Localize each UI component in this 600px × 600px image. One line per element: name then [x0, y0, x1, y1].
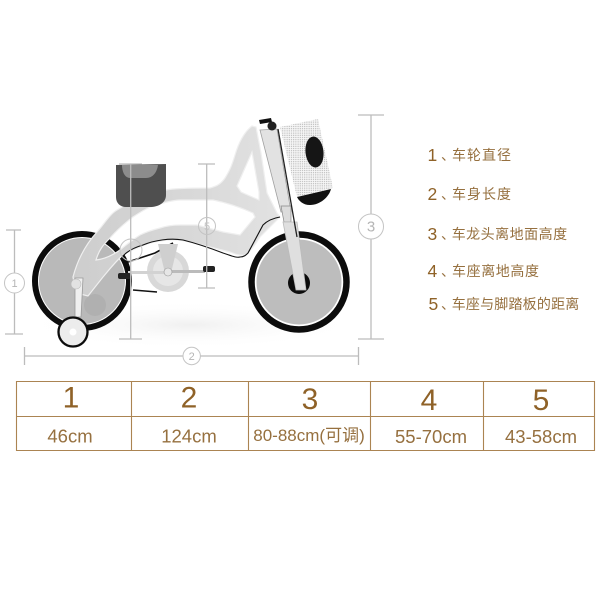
measurement values [47, 426, 577, 447]
measurement values: 43-58cm [505, 426, 577, 447]
ground shadow [20, 301, 360, 349]
pedal arm and pedal [118, 266, 215, 279]
legend item 3: 、 [441, 226, 455, 242]
rear drive pulley [128, 243, 189, 292]
legend item 5 [428, 294, 580, 314]
front wheel [252, 234, 346, 330]
legend item 2 [428, 184, 512, 204]
header numbers [63, 382, 549, 417]
dimension 3: handlebar height [358, 115, 384, 339]
dimension 4: seat height [119, 164, 142, 339]
header numbers: 2 [181, 382, 197, 414]
legend item 5: 5 [428, 294, 438, 314]
measurement values: 55-70cm [395, 426, 467, 447]
legend item 4: 、 [441, 263, 455, 279]
header numbers: 5 [533, 384, 549, 417]
header numbers: 1 [63, 382, 79, 414]
seat [116, 164, 166, 207]
bike frame [73, 126, 280, 296]
dimension 2: body length: 2 [189, 351, 195, 363]
frame wire [122, 217, 280, 257]
legend item 1: 、 [441, 147, 455, 163]
legend item 5: 车座与脚踏板的距离 [452, 296, 580, 312]
dimension 3: handlebar height: 3 [367, 218, 375, 236]
legend item 3: 3 [428, 224, 437, 244]
table grid [16, 382, 594, 450]
header numbers: 4 [421, 384, 437, 417]
legend item 2: 、 [441, 186, 455, 202]
legend item 5: 、 [441, 296, 455, 312]
training wheel [58, 318, 88, 346]
rear wheel [35, 234, 129, 328]
measurement values: 80-88cm(可调) [253, 426, 365, 445]
bicycle illustration [35, 118, 346, 346]
rear axle fork [75, 278, 83, 317]
legend item 4: 4 [428, 261, 438, 281]
legend list [428, 145, 580, 314]
legend item 4: 车座离地高度 [452, 263, 540, 279]
legend item 1: 车轮直径 [452, 147, 512, 163]
dimension 1: wheel diameter [4, 230, 24, 334]
dimension 1: wheel diameter: 1 [11, 278, 18, 290]
dimension 5: seat to pedal distance [198, 164, 216, 288]
legend item 1 [428, 145, 512, 165]
fork and steering column [259, 118, 306, 290]
dimension 5: seat to pedal distance: 5 [204, 221, 210, 233]
legend item 3: 车龙头离地面高度 [452, 226, 568, 242]
legend item 2: 车身长度 [452, 186, 512, 202]
measurement values: 124cm [161, 426, 217, 446]
dimensions table [16, 382, 594, 450]
front basket [280, 119, 333, 205]
dimension 2: body length [24, 347, 358, 365]
measurement values: 46cm [47, 426, 93, 446]
legend item 4 [428, 261, 540, 281]
header numbers: 3 [302, 383, 318, 416]
legend item 3 [428, 224, 568, 244]
legend item 2: 2 [428, 184, 437, 204]
legend item 1: 1 [428, 145, 437, 165]
